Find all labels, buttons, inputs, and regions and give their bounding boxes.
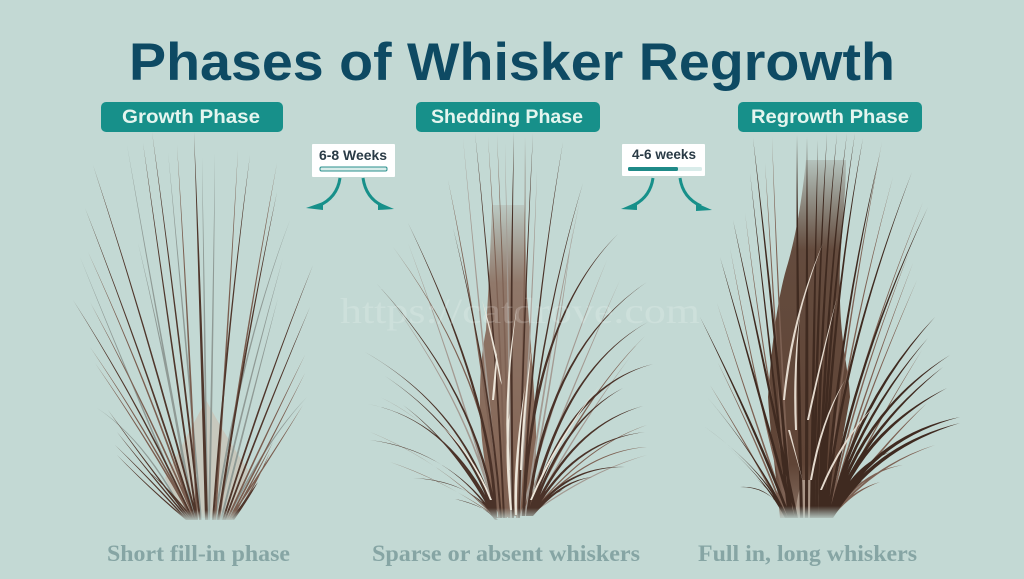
label: growth phase: Growth Phase <box>122 107 260 128</box>
duration tag: 4-6 weeks: 4-6 weeks <box>632 146 696 162</box>
label: shedding phase: Shedding Phase <box>431 107 583 128</box>
arrows from 4-6 weeks <box>621 178 712 211</box>
plant: growth phase whiskers <box>73 132 313 520</box>
caption: regrowth phase: Full in, long whiskers <box>698 541 917 566</box>
caption: shedding phase: Sparse or absent whiskers <box>372 541 640 566</box>
plant: regrowth phase whiskers <box>700 133 960 518</box>
label: growth phase <box>101 102 283 132</box>
label: regrowth phase <box>738 102 922 132</box>
title: Phases of Whisker Regrowth <box>129 33 895 92</box>
watermark: https://catdrove.com <box>340 291 700 331</box>
label: shedding phase <box>416 102 600 132</box>
caption: growth phase: Short fill-in phase <box>107 541 290 566</box>
plant: shedding phase whiskers <box>365 132 653 520</box>
arrows from 6-8 weeks <box>306 178 394 210</box>
duration tag: 6-8 weeks: 6-8 Weeks <box>319 147 387 163</box>
duration tag: 6-8 weeks <box>312 144 395 177</box>
label: regrowth phase: Regrowth Phase <box>751 107 909 128</box>
duration tag: 4-6 weeks <box>622 144 705 176</box>
